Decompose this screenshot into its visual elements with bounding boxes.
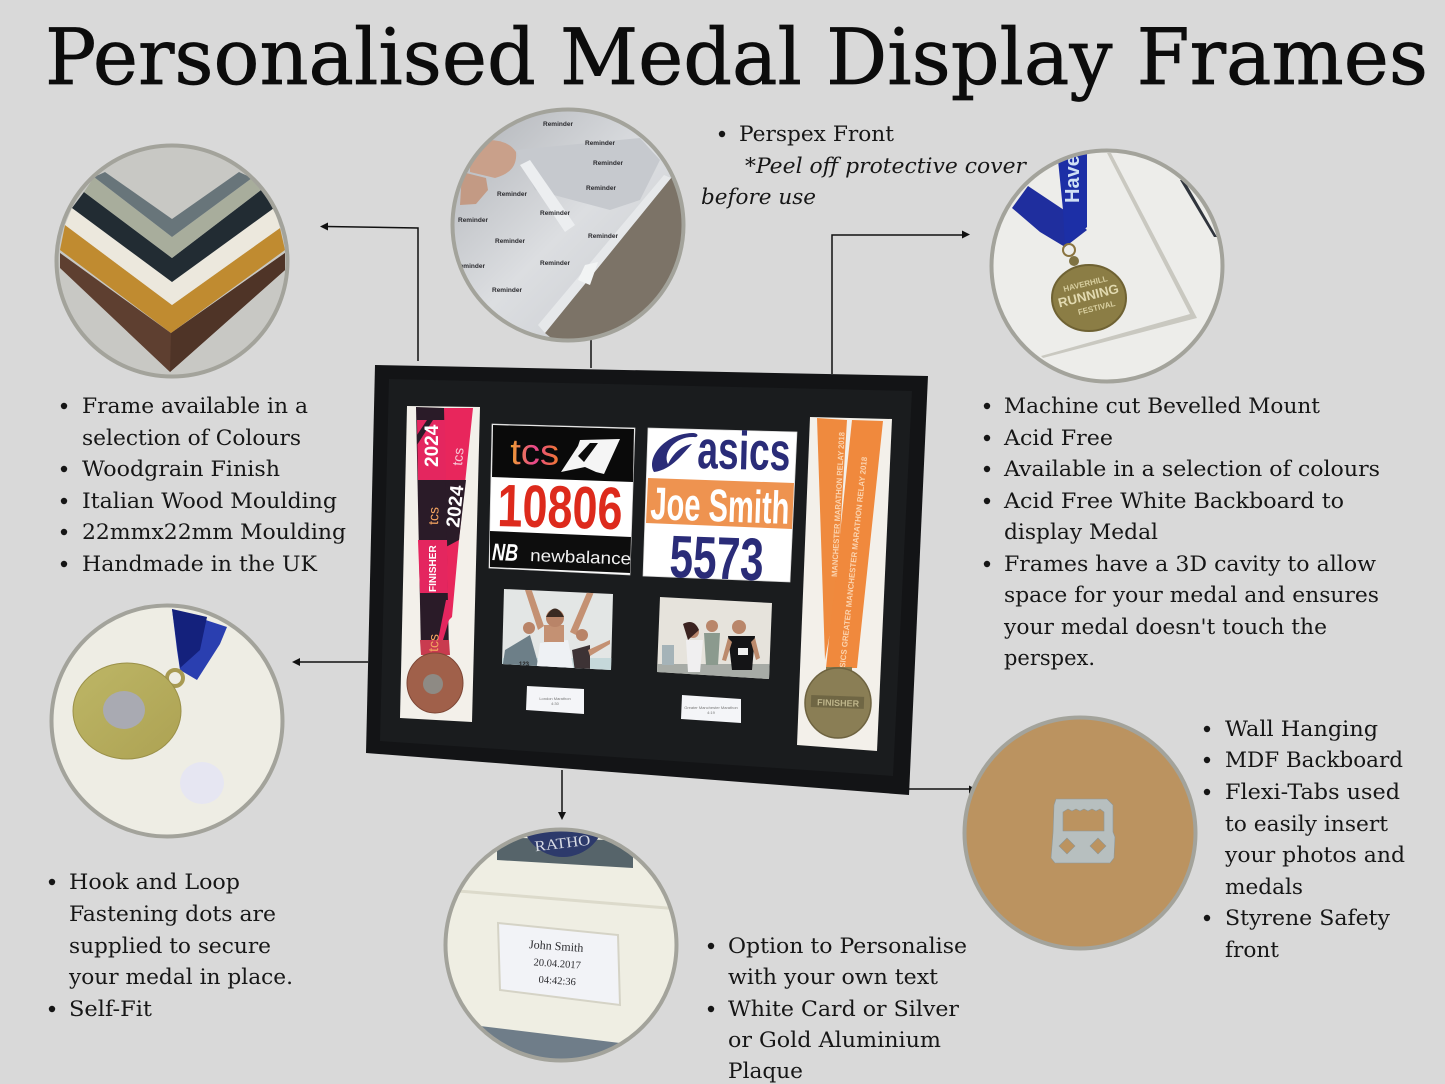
plaque: London Marathon: [526, 686, 584, 714]
text block: personalisation features: Plaque: [728, 1059, 803, 1083]
text block: personalisation features: or Gold Aluminium: [728, 1028, 941, 1052]
circle: perspex protective film: Reminder: [593, 160, 623, 167]
text block: personalisation features: with your own text: [728, 965, 939, 989]
arrow: frame to plaque circle: [558, 770, 566, 820]
text block: backboard features: Wall Hanging: [1225, 717, 1378, 741]
text block: perspex front: Perspex Front: [739, 122, 895, 146]
text block: mount features: space for your medal and ensures: [1004, 583, 1379, 607]
left medal window: 2024: [422, 424, 443, 467]
right medal window: MANCHESTER MARATHON RELAY 2018: [830, 431, 847, 577]
text block: frame features: Frame available in a: [82, 394, 308, 418]
text block: mount features: display Medal: [1004, 520, 1158, 544]
circle: personalised plaque: John Smith: [529, 937, 584, 955]
text block: backboard features: [1204, 717, 1405, 962]
text block: backboard features: MDF Backboard: [1225, 748, 1403, 772]
race bib: Joe Smith 5573: 5573: [669, 523, 765, 593]
circle: perspex protective film: Reminder: [588, 233, 618, 240]
text block: perspex front: *Peel off protective cover: [745, 154, 1028, 178]
title: Personalised Medal Display Frames: [45, 13, 1428, 103]
text block: frame features: Handmade in the UK: [82, 552, 317, 576]
text block: hook and loop features: supplied to secure: [69, 934, 271, 958]
text block: personalisation features: White Card or Silver: [728, 997, 960, 1021]
circle: perspex protective film: Reminder: [458, 217, 488, 224]
circle ring: bevelled mount: [992, 150, 1222, 382]
circle: perspex protective film: Reminder: [455, 263, 485, 270]
text block: perspex front: [701, 122, 1028, 209]
circle: frame colour mouldings: [58, 148, 286, 374]
text block: hook and loop features: [49, 870, 293, 1021]
plaque: London Marathon: London Marathon: [539, 696, 571, 701]
race bib: 10806: NB: [492, 539, 519, 567]
connector: perspex circle to frame: [590, 340, 592, 368]
race bib: 10806: tcs: [510, 431, 560, 473]
race bib: Joe Smith 5573: Joe Smith: [650, 477, 790, 534]
text block: personalisation features: [708, 934, 967, 1083]
race bib: 10806: newbalance: [530, 546, 631, 569]
right medal window: FINISHER: [817, 697, 860, 709]
circle: perspex protective film: Reminder: [540, 260, 570, 267]
right medal window: SICS GREATER MANCHESTER MARATHON RELAY 2018: [838, 456, 869, 668]
text block: hook and loop features: Self-Fit: [69, 997, 153, 1021]
race bib: 10806: [489, 424, 635, 575]
race bib: Joe Smith 5573: [643, 420, 797, 593]
text block: backboard features: to easily insert: [1225, 812, 1389, 836]
text block: frame features: 22mmx22mm Moulding: [82, 520, 346, 544]
text block: mount features: Frames have a 3D cavity to allow: [1004, 552, 1376, 576]
text block: backboard features: Flexi-Tabs used: [1225, 780, 1400, 804]
race bib: 10806: 10806: [497, 472, 623, 542]
text block: backboard features: Styrene Safety: [1225, 906, 1390, 930]
circle: bevelled mount and medal: FESTIVAL: [1077, 299, 1116, 317]
circle ring: perspex: [452, 110, 684, 340]
left medal window: tcs: [425, 634, 442, 652]
text block: mount features: Acid Free White Backboard to: [1003, 489, 1344, 513]
text block: mount features: Acid Free: [1003, 426, 1113, 450]
circle: perspex protective film: [454, 112, 682, 338]
text block: frame features: [61, 394, 346, 576]
circle: perspex protective film: Reminder: [497, 191, 527, 198]
arrow: frame moulding to colour circle: [320, 222, 418, 361]
arrow: frame to bevelled mount circle: [832, 230, 970, 374]
text block: hook and loop features: Hook and Loop: [69, 870, 240, 894]
text block: hook and loop features: your medal in place.: [68, 965, 293, 989]
circle: personalised plaque: [448, 832, 674, 1058]
circle: personalised plaque: 04:42:36: [538, 975, 576, 988]
circle ring: backboard: [964, 718, 1196, 948]
plaque: London Marathon: 4:30: [551, 701, 560, 706]
left medal window: 2024: [443, 484, 468, 529]
arrow: frame to hook and loop circle: [292, 658, 368, 666]
text block: frame features: Woodgrain Finish: [82, 457, 280, 481]
circle: bevelled mount and medal: [994, 152, 1220, 380]
left medal window: tcs: [449, 447, 467, 466]
circle: personalised plaque: 20.04.2017: [533, 957, 581, 972]
photo: runners on promenade: [657, 597, 772, 679]
circle: perspex protective film: Reminder: [495, 238, 525, 245]
circle: hook and loop fastening: [54, 608, 280, 834]
plaque: Greater Manchester Marathon: [681, 695, 741, 723]
circle ring: hook and loop: [52, 606, 282, 836]
text block: frame features: Italian Wood Moulding: [82, 489, 337, 513]
circle: perspex protective film: Reminder: [543, 121, 573, 128]
circle ring: plaque: [446, 830, 676, 1060]
circle: bevelled mount and medal: HAVERHILL: [1062, 274, 1109, 294]
arrow: frame to backboard circle: [909, 786, 977, 794]
plaque: Greater Manchester Marathon: Greater Manchester Marathon: [684, 705, 738, 710]
circle: perspex protective film: Reminder: [540, 210, 570, 217]
medal display frame: [366, 365, 928, 795]
text block: perspex front: before use: [701, 185, 816, 209]
circle: perspex protective film: Reminder: [586, 185, 616, 192]
photo: runners celebrating: 123: [519, 662, 530, 668]
left medal window: tcs: [425, 507, 442, 525]
circle: bevelled mount and medal: RUNNING: [1057, 281, 1120, 310]
circle: bevelled mount and medal: Have: [1062, 155, 1084, 203]
text block: mount features: Available in a selection of colours: [1003, 457, 1380, 481]
race bib: Joe Smith 5573: asics: [697, 420, 791, 482]
text block: backboard features: medals: [1225, 875, 1303, 899]
circle ring: frame colours: [56, 146, 288, 376]
circle: MDF backboard with hanger: [966, 720, 1194, 946]
text block: backboard features: front: [1225, 938, 1280, 962]
text block: backboard features: your photos and: [1224, 843, 1405, 867]
photo: runners celebrating: [502, 589, 613, 670]
text block: personalisation features: Option to Personalise: [728, 934, 967, 958]
circle: perspex protective film: Reminder: [585, 140, 615, 147]
text block: mount features: your medal doesn't touch the: [1003, 615, 1327, 639]
circle: perspex protective film: Reminder: [492, 287, 522, 294]
plaque: Greater Manchester Marathon: 4:19: [707, 710, 716, 715]
text block: mount features: [984, 394, 1380, 670]
text block: mount features: perspex.: [1004, 646, 1095, 670]
circle: personalised plaque: RATHO: [534, 833, 591, 855]
left medal window: [400, 406, 480, 722]
left medal window: FINISHER: [428, 545, 439, 592]
text block: hook and loop features: Fastening dots are: [69, 902, 276, 926]
right medal window: [797, 417, 892, 751]
text block: mount features: Machine cut Bevelled Mount: [1004, 394, 1321, 418]
text block: frame features: selection of Colours: [82, 426, 301, 450]
